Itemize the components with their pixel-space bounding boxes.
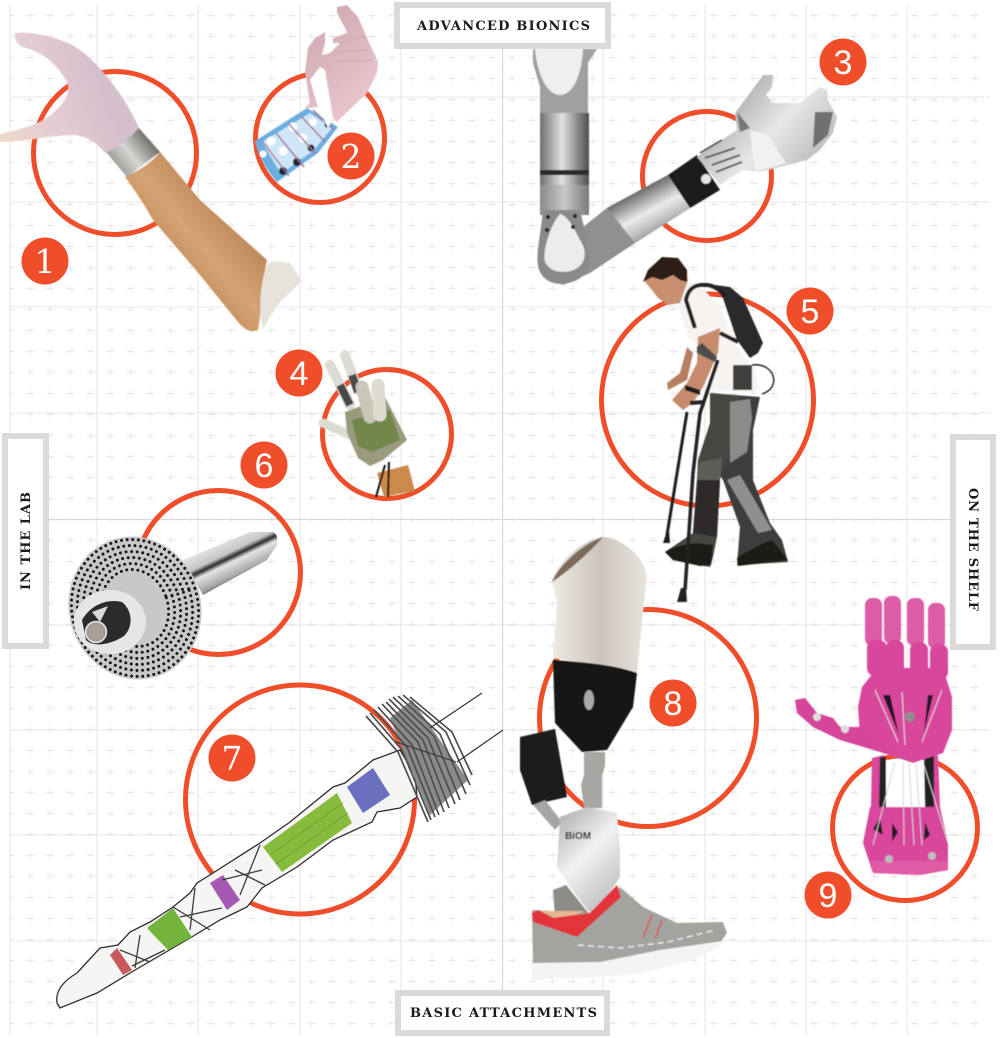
ring 1 xyxy=(34,72,196,234)
backpack xyxy=(715,285,763,358)
near arm xyxy=(672,328,720,410)
gray leg panels xyxy=(730,399,752,463)
ring 8 xyxy=(540,610,756,826)
label: on the shelf xyxy=(953,437,993,647)
ankle joint xyxy=(553,885,590,925)
shoe sole xyxy=(532,941,723,980)
label: in the lab xyxy=(5,436,46,646)
elbow xyxy=(537,210,589,284)
number badge 6 xyxy=(240,442,288,488)
icon: translucent circuit hand xyxy=(323,355,415,497)
panel: item 2, sensor glove hand xyxy=(255,5,384,202)
upper arm xyxy=(533,49,597,215)
far arm xyxy=(667,347,693,390)
panel: item 7, tissue-engineered finger xyxy=(57,685,503,1008)
number badge 5 xyxy=(786,288,834,334)
panel: item 4, lab hand xyxy=(276,350,452,498)
ring 3 xyxy=(642,112,772,240)
shoe upper xyxy=(532,887,727,965)
label: on the shelf: ON THE SHELF xyxy=(965,488,980,612)
palm xyxy=(858,668,952,763)
thumb xyxy=(795,698,890,755)
trousers rear leg xyxy=(710,393,788,565)
liner sock xyxy=(552,537,647,673)
shirt xyxy=(678,282,760,393)
icon: cosmetic forearm and hand xyxy=(0,33,302,331)
number badge 8 xyxy=(650,680,696,726)
glove hand xyxy=(697,75,837,185)
panel: item 9, 3D-printed hand xyxy=(795,596,978,918)
blue band xyxy=(347,768,390,813)
shoes xyxy=(665,540,788,566)
number badge 9: 9 xyxy=(819,877,837,915)
number badge 4: 4 xyxy=(290,355,308,393)
ring 4 xyxy=(322,370,452,498)
number badge 2: 2 xyxy=(340,137,362,176)
window and rails xyxy=(880,760,926,808)
number badge 2 xyxy=(328,132,374,180)
black socket xyxy=(553,660,637,752)
panel: item 5, walking exoskeleton xyxy=(602,257,834,602)
ring 9 xyxy=(832,756,978,900)
number badge 9 xyxy=(804,872,852,918)
gauntlet xyxy=(863,807,948,875)
forearm xyxy=(540,155,720,285)
number badge 3 xyxy=(820,38,866,86)
shoulder strap xyxy=(686,285,738,342)
ring 6 xyxy=(136,490,300,654)
icon: magenta printed hand xyxy=(795,596,952,875)
label: advanced bionics: ADVANCED BIONICS xyxy=(416,19,590,34)
number badge 8: 8 xyxy=(664,685,682,723)
linkage xyxy=(533,800,562,830)
number badge 1 xyxy=(22,238,68,284)
trousers front leg xyxy=(665,393,740,567)
icon: sketched finger with tendon bands xyxy=(57,693,503,1008)
pylon xyxy=(581,752,605,808)
number badge 7 xyxy=(208,734,256,782)
number badge 3: 3 xyxy=(834,44,852,82)
battery unit xyxy=(520,729,567,805)
label: basic attachments: BASIC ATTACHMENTS xyxy=(410,1006,597,1021)
number badge 1: 1 xyxy=(34,242,56,281)
number badge 5: 5 xyxy=(801,293,819,331)
icon: hand with blue mesh sleeve xyxy=(255,5,378,182)
icon: person in exoskeleton with crutches xyxy=(643,257,788,602)
icon: titanium bone anchor xyxy=(50,519,278,697)
red band xyxy=(110,948,132,975)
purple band xyxy=(210,875,240,910)
ring 5 xyxy=(602,294,814,506)
ankle housing xyxy=(557,807,620,913)
panel: item 8, BiOM ankle prosthesis xyxy=(520,537,756,980)
far crutch xyxy=(667,412,687,535)
label: advanced bionics xyxy=(397,5,608,46)
label: in the lab: IN THE LAB xyxy=(19,492,34,590)
near crutch xyxy=(685,360,718,590)
panel: item 1, cosmetic arm xyxy=(0,33,302,331)
green band small xyxy=(147,908,192,950)
ring 2 xyxy=(256,74,384,202)
green band large xyxy=(263,793,352,872)
panel: item 3, powered arm xyxy=(533,38,866,285)
crossing tendons xyxy=(120,845,265,968)
icon: robotic arm xyxy=(533,49,837,285)
head xyxy=(645,270,688,305)
number badge 4 xyxy=(276,350,322,396)
number badge 6: 6 xyxy=(255,447,273,485)
BiOM logo: BiOM xyxy=(565,831,591,842)
bristle bundle xyxy=(390,700,468,815)
number badge 7: 7 xyxy=(222,739,242,778)
strings xyxy=(873,762,948,845)
panel: item 6, implant xyxy=(50,442,300,697)
label: basic attachments xyxy=(398,993,607,1033)
wires xyxy=(430,693,503,762)
fingers xyxy=(865,596,945,649)
icon: prosthetic leg with shoe xyxy=(520,537,727,980)
ring 7 xyxy=(186,685,414,914)
bone outline xyxy=(57,750,417,1008)
